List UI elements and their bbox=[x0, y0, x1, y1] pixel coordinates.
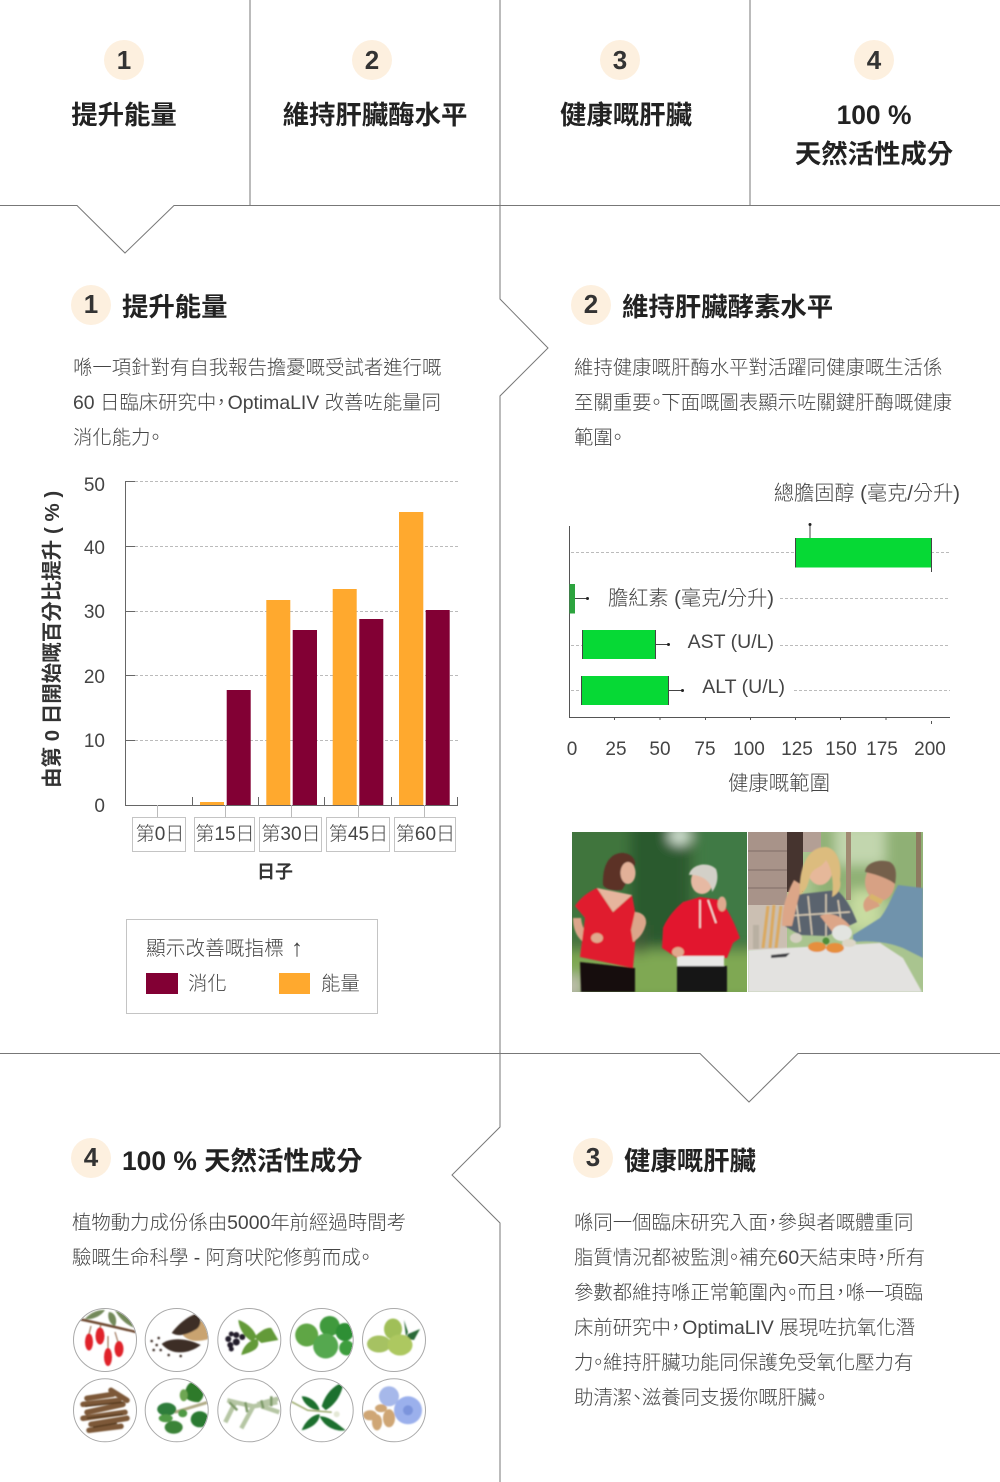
text block: section 3: 參數都維持喺正常範圍內。而且，喺一項臨 bbox=[574, 1282, 923, 1304]
heading: section 1 bbox=[71, 285, 228, 325]
heading: section 3: 3 bbox=[586, 1142, 600, 1172]
legend: ↑ bbox=[291, 935, 303, 962]
top column 1: 1 bbox=[117, 45, 131, 75]
icon: green fruits bbox=[362, 1308, 426, 1372]
text block: section 2: 維持健康嘅肝酶水平對活躍同健康嘅生活係 bbox=[574, 357, 942, 379]
heading: section 4: 4 bbox=[84, 1142, 99, 1172]
range bar: AST bbox=[582, 630, 670, 659]
x axis category labels: 第15日 bbox=[195, 823, 255, 845]
range bar: bilirubin bbox=[570, 584, 589, 614]
top column 1 bbox=[71, 40, 177, 130]
legend bbox=[126, 920, 378, 1014]
range labels: AST (U/L) bbox=[688, 631, 774, 653]
top column 4 bbox=[795, 40, 953, 169]
range labels bbox=[608, 482, 960, 698]
text block: section 3: 喺同一個臨床研究入面，參與者嘅體重同 bbox=[574, 1212, 913, 1234]
text block: section 3: 力。維持肝臟功能同保護免受氧化壓力有 bbox=[574, 1352, 913, 1374]
heading: section 1: 提升能量 bbox=[122, 292, 228, 322]
y axis numbers: 0 bbox=[94, 796, 105, 817]
x axis numbers: 150 bbox=[825, 739, 857, 760]
x axis title: 日子 bbox=[257, 862, 293, 882]
text block: section 3: 脂質情況都被監測。補充60天結束時，所有 bbox=[574, 1247, 925, 1269]
y axis numbers: 10 bbox=[84, 731, 105, 752]
range labels: 總膽固醇 (毫克/分升) bbox=[774, 482, 960, 505]
icon: dark green leaves bbox=[290, 1379, 353, 1442]
heading: section 2 bbox=[571, 285, 833, 325]
y axis numbers: 30 bbox=[84, 602, 105, 623]
legend: 能量 bbox=[321, 973, 360, 995]
text block: section 3 bbox=[574, 1212, 925, 1409]
top column 1: 提升能量 bbox=[71, 100, 177, 130]
legend: 顯示改善嘅指標 bbox=[146, 938, 284, 960]
x axis numbers bbox=[567, 739, 946, 760]
legend: 消化 bbox=[188, 973, 227, 995]
text block: section 1: 喺一項針對有自我報告擔憂嘅受試者進行嘅 bbox=[73, 357, 441, 379]
y axis numbers: 20 bbox=[84, 667, 105, 688]
x axis category labels bbox=[132, 818, 456, 852]
text block: section 1: 60 日臨床研究中， OptimaLIV 改善咗能量同 bbox=[73, 392, 441, 414]
x axis numbers: 200 bbox=[914, 739, 946, 760]
x axis numbers: 50 bbox=[649, 739, 671, 760]
top column 2: 2 bbox=[365, 45, 379, 75]
x axis numbers: 125 bbox=[781, 739, 813, 760]
bar chart: energy and digestion bbox=[40, 475, 459, 882]
x axis category labels: 第30日 bbox=[261, 823, 321, 845]
icon: goji berries bbox=[74, 1308, 136, 1372]
top column 3: 健康嘅肝臟 bbox=[560, 100, 693, 130]
top column 2: 維持肝臟酶水平 bbox=[283, 100, 467, 130]
x axis category labels: 第45日 bbox=[329, 823, 388, 845]
top column 4: 4 bbox=[867, 45, 882, 75]
x axis title: 健康嘅範圍 bbox=[728, 772, 830, 795]
top column 3: 3 bbox=[613, 45, 627, 75]
top column 4: 100 % bbox=[837, 100, 911, 130]
heading: section 1: 1 bbox=[84, 289, 98, 319]
icon: dried roots bbox=[74, 1379, 136, 1442]
x axis numbers: 25 bbox=[605, 739, 627, 760]
text block: section 1 bbox=[73, 357, 441, 449]
range chart: healthy liver ranges bbox=[567, 482, 960, 795]
ingredient icons bbox=[74, 1308, 426, 1442]
text block: section 1: 消化能力。 bbox=[73, 427, 160, 449]
y axis numbers: 50 bbox=[84, 475, 105, 496]
range bar: total cholesterol bbox=[795, 523, 932, 572]
heading: section 2: 維持肝臟酵素水平 bbox=[622, 292, 833, 322]
icon: berries and leaves bbox=[218, 1308, 281, 1372]
bars: digestion bbox=[227, 610, 450, 805]
x axis category labels: 第60日 bbox=[396, 823, 455, 845]
y axis numbers: 40 bbox=[84, 538, 105, 559]
text block: section 2: 範圍。 bbox=[574, 427, 622, 449]
y axis numbers bbox=[84, 475, 105, 817]
text block: section 4: 植物動力成份係由5000年前經過時間考 bbox=[72, 1212, 406, 1234]
range labels: 膽紅素 (毫克/分升) bbox=[608, 587, 774, 610]
x axis numbers: 175 bbox=[866, 739, 898, 760]
range labels: ALT (U/L) bbox=[702, 676, 785, 698]
text block: section 3: 床前研究中， OptimaLIV 展現咗抗氧化潛 bbox=[574, 1317, 915, 1339]
x axis numbers: 75 bbox=[694, 739, 716, 760]
icon: gotu kola leaves bbox=[290, 1308, 354, 1372]
top column 2 bbox=[283, 40, 467, 130]
icon: blue flowers and roots bbox=[362, 1379, 426, 1442]
text block: section 4 bbox=[72, 1212, 406, 1269]
photo: couple at table bbox=[748, 825, 930, 992]
x axis numbers: 0 bbox=[567, 739, 577, 760]
range bar: ALT bbox=[581, 676, 684, 705]
x axis category labels: 第0日 bbox=[136, 823, 184, 845]
heading: section 4: 100 % 天然活性成分 bbox=[122, 1146, 363, 1176]
icon: green sprig bbox=[145, 1379, 209, 1442]
icon: pale herb bbox=[218, 1379, 281, 1442]
icon: black pepper bbox=[145, 1308, 210, 1372]
text block: section 2: 至關重要。下面嘅圖表顯示咗關鍵肝酶嘅健康 bbox=[574, 392, 952, 414]
heading: section 3 bbox=[573, 1138, 757, 1178]
text block: section 3: 助清潔、滋養同支援你嘅肝臟。 bbox=[574, 1387, 826, 1409]
photo: two women jogging bbox=[572, 832, 747, 992]
top column 4: 天然活性成分 bbox=[795, 139, 953, 169]
heading: section 4 bbox=[71, 1138, 363, 1178]
x axis numbers: 100 bbox=[733, 739, 765, 760]
heading: section 2: 2 bbox=[584, 289, 598, 319]
bars: energy bbox=[200, 512, 423, 805]
heading: section 3: 健康嘅肝臟 bbox=[624, 1146, 757, 1176]
y axis title: 由第 0 日開始嘅百分比提升 ( % ) bbox=[40, 491, 64, 788]
text block: section 2 bbox=[574, 357, 952, 449]
text block: section 4: 驗嘅生命科學 - 阿育吠陀修剪而成。 bbox=[72, 1247, 370, 1269]
top column 3 bbox=[560, 40, 693, 130]
